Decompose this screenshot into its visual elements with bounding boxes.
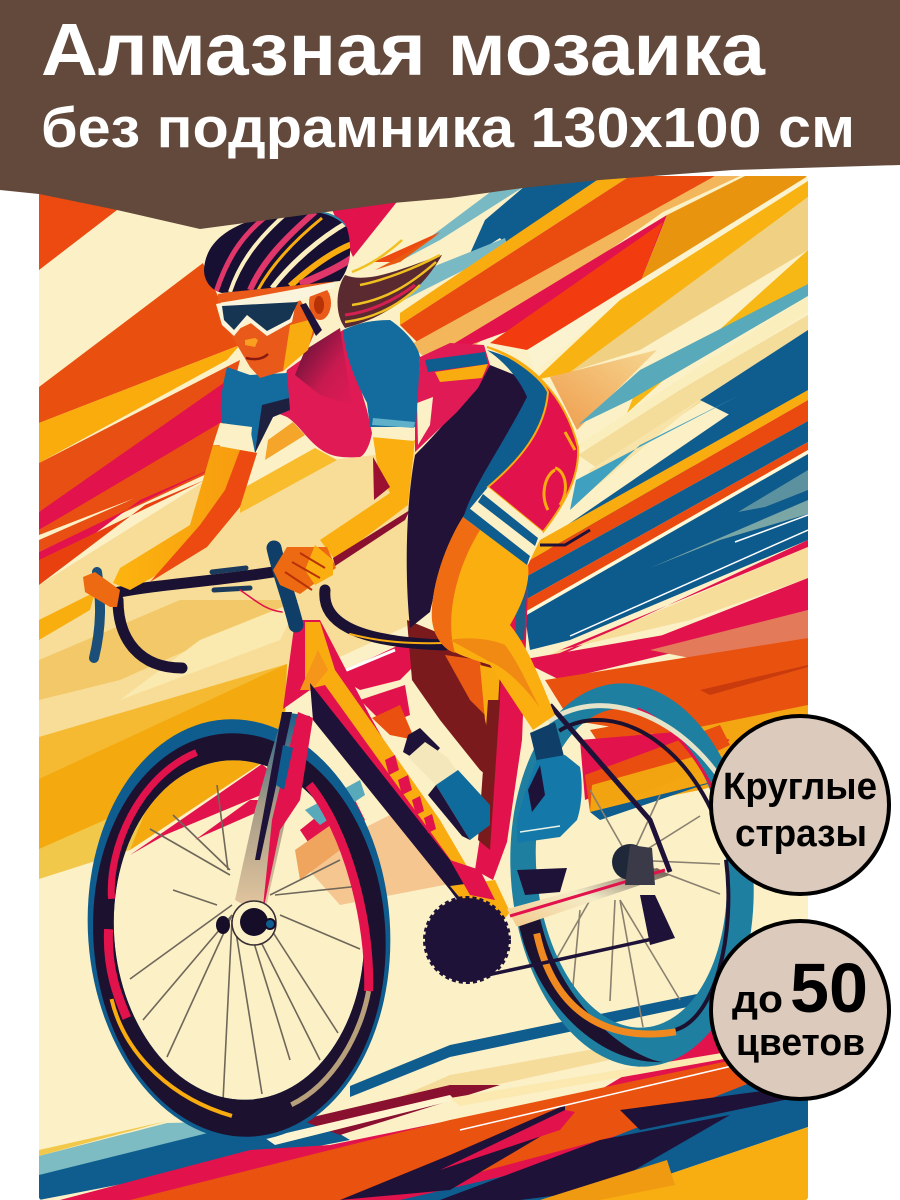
badge text "цветов": цветов <box>736 1022 865 1064</box>
hair <box>338 233 442 328</box>
sock and shoe <box>517 722 582 843</box>
top bar <box>115 570 285 593</box>
chain <box>483 938 657 976</box>
sunglasses <box>216 282 335 336</box>
background: upper left streaks <box>39 176 420 879</box>
fork <box>235 712 310 916</box>
left hand <box>83 572 120 607</box>
badge: round rhinestones <box>711 716 889 894</box>
illustration: front hub <box>216 901 276 945</box>
illustration: cyclist <box>83 205 582 843</box>
face <box>230 286 331 378</box>
front wheel rim and tyre <box>74 709 404 1151</box>
badge number 50: 50 <box>790 949 868 1027</box>
rim lines <box>537 922 676 1044</box>
seat tube <box>475 575 528 880</box>
derailleur <box>640 895 675 945</box>
front wheel spokes <box>130 785 360 1101</box>
illustration: water bottle <box>403 728 490 840</box>
badge: up to 50 colours <box>711 921 889 1099</box>
shorts <box>407 365 541 628</box>
hip panel <box>487 347 578 532</box>
illustration: bicycle front wheel <box>74 709 404 1151</box>
illustration: far leg <box>407 620 505 790</box>
torso jersey <box>277 330 372 457</box>
right grip <box>274 548 296 625</box>
thigh cuff <box>463 487 543 565</box>
helmet <box>204 212 350 293</box>
right sleeve <box>343 320 420 441</box>
neck <box>295 328 352 405</box>
rear wheel rim and tyre <box>495 673 769 1077</box>
illustration: handlebars <box>94 548 445 668</box>
bottom bracket area <box>450 880 510 925</box>
seat stay <box>550 705 670 872</box>
illustration: bicycle frame <box>235 530 670 940</box>
banner shape <box>0 0 900 229</box>
bottom dark tyre crescent <box>517 904 663 1074</box>
left arm <box>113 445 257 590</box>
frame lettering band <box>385 755 436 833</box>
head tube and down tube <box>283 620 500 915</box>
left drop <box>118 600 182 668</box>
background: road bands <box>39 994 808 1200</box>
header banner <box>0 0 900 229</box>
panel: artwork background <box>39 176 808 1200</box>
speckled streak <box>650 500 808 568</box>
illustration: drivetrain <box>425 844 675 982</box>
background: top centre streaks <box>330 176 808 370</box>
illustration: bicycle rear wheel <box>495 673 769 1077</box>
stem <box>212 568 250 590</box>
heading line 2: без подрамника 130х100 см <box>41 96 855 160</box>
background: centre spikes behind frame <box>130 640 470 905</box>
pedal <box>517 868 567 895</box>
badge text "до": до <box>732 979 783 1021</box>
badge text line 2: стразы <box>735 813 867 855</box>
right hand <box>273 545 336 594</box>
rear wheel spokes <box>550 790 720 1027</box>
back jersey <box>415 343 490 452</box>
leg <box>432 517 555 730</box>
left sleeve <box>213 367 290 453</box>
chainring <box>425 898 509 982</box>
seat clamp <box>540 530 590 545</box>
right drop <box>325 590 445 645</box>
background: right side streaks <box>520 176 808 820</box>
heading line 1: Алмазная мозаика <box>41 8 766 91</box>
left brake lever <box>94 572 100 658</box>
headband <box>218 275 335 303</box>
chainstay <box>507 868 670 927</box>
right arm <box>320 437 415 566</box>
brake cables <box>240 590 282 612</box>
badge text line 1: Круглые <box>723 766 877 808</box>
blue side panel <box>462 350 548 522</box>
